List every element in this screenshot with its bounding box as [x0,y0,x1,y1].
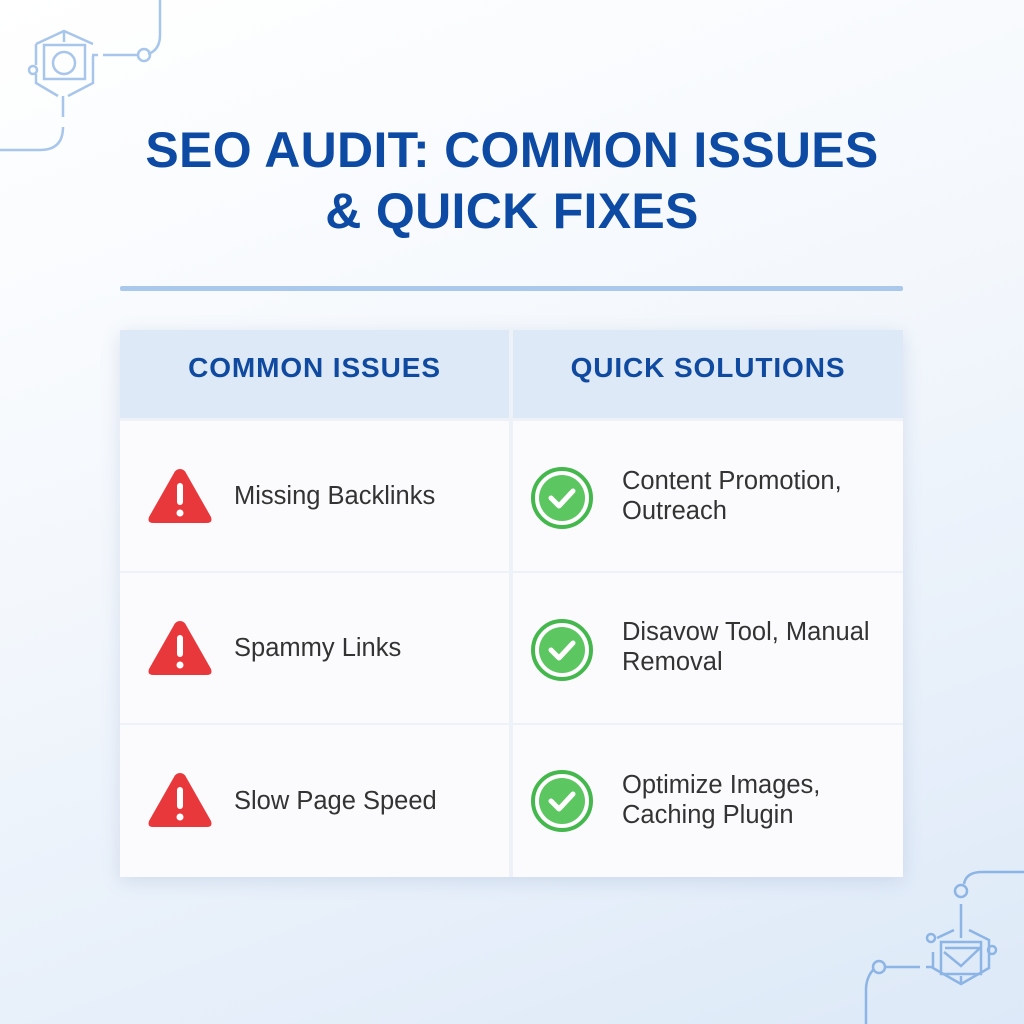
icon: warning [148,469,212,523]
row 2 solution: Removal [622,648,723,676]
row 1 issue: Missing Backlinks [234,482,435,510]
header: common issues: COMMON ISSUES [188,352,441,383]
title [145,122,879,239]
row 1 solution: Outreach [622,497,727,525]
title: & QUICK FIXES [325,183,699,239]
row 3 solution: Caching Plugin [622,801,794,829]
header: quick solutions [513,330,903,418]
row 2 issue [120,573,509,723]
row 3 solution: Optimize Images, [622,771,820,799]
icon: check [531,770,593,832]
header: quick solutions: QUICK SOLUTIONS [571,352,845,383]
header: common issues [120,330,509,418]
icon: check [531,619,593,681]
row 2 solution [513,573,903,723]
row 2 solution: Disavow Tool, Manual [622,618,870,646]
title underline [120,286,903,291]
row 2 issue: Spammy Links [234,634,401,662]
icon: warning [148,621,212,675]
decoration: top-left circuit [0,0,162,152]
row 1 solution: Content Promotion, [622,467,842,495]
decoration: bottom-right circuit [864,870,1024,1024]
title: SEO AUDIT: COMMON ISSUES [145,122,879,178]
row 3 solution [513,725,903,877]
row 1 issue [120,421,509,571]
panel: table [120,330,903,877]
row 1 solution [513,421,903,571]
icon: check [531,467,593,529]
row 3 issue [120,725,509,877]
icon: warning [148,773,212,827]
row 3 issue: Slow Page Speed [234,787,437,815]
